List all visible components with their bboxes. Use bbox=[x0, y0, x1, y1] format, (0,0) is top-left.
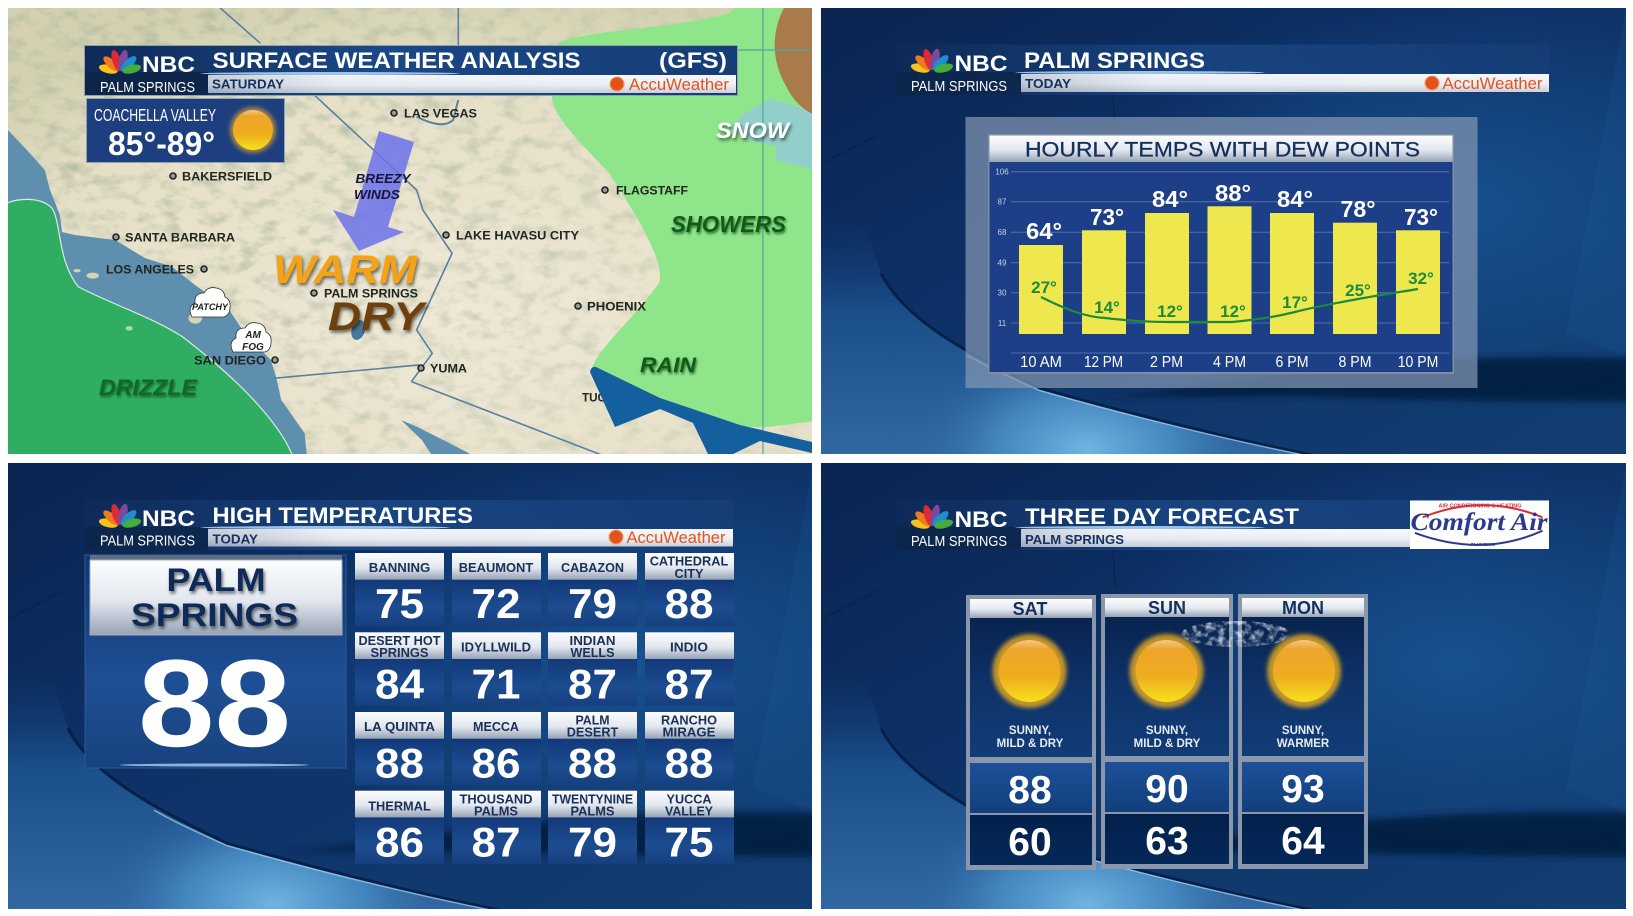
city: desert hot springs: 84 bbox=[375, 661, 425, 708]
dew point labels: 12° bbox=[1157, 302, 1183, 321]
panel: palm springs feature temperature: 88 bbox=[138, 635, 291, 773]
temperature labels: 78° bbox=[1340, 196, 1376, 222]
temperature labels bbox=[1026, 180, 1438, 244]
arrow: breezy winds: WINDS bbox=[354, 188, 401, 202]
forecast column: saturday: SUNNY, bbox=[1009, 725, 1051, 737]
city: banning: 75 bbox=[375, 580, 424, 627]
city: palm desert: DESERT bbox=[567, 724, 618, 740]
header bar: surface weather analysis: SATURDAY bbox=[212, 78, 285, 92]
temperature labels: 73° bbox=[1090, 204, 1124, 230]
panel: palm springs feature temperature bbox=[85, 555, 346, 773]
label: rain: RAIN bbox=[640, 354, 697, 377]
forecast column: saturday bbox=[966, 595, 1096, 870]
hour labels: 10 PM bbox=[1398, 354, 1438, 371]
panel: high temperatures bbox=[3, 455, 821, 916]
grid: city temperatures bbox=[355, 553, 734, 865]
city: la quinta bbox=[355, 712, 444, 786]
city labels: BAKERSFIELD bbox=[182, 170, 272, 184]
header bar: high temperatures: PALM SPRINGS bbox=[100, 532, 195, 550]
forecast column: saturday: MILD & DRY bbox=[997, 738, 1064, 750]
city: indian wells: 87 bbox=[568, 661, 617, 708]
label: drizzle: DRIZZLE bbox=[99, 375, 198, 400]
city: twentynine palms: PALMS bbox=[570, 804, 615, 818]
city: banning bbox=[355, 553, 444, 627]
cloud: patchy fog bbox=[190, 288, 230, 317]
temperature labels: 73° bbox=[1404, 204, 1438, 230]
cloud: am fog bbox=[231, 323, 271, 353]
header bar: high temperatures: NBC bbox=[142, 506, 195, 531]
label: dry: DRY bbox=[328, 295, 428, 339]
hour labels: 8 PM bbox=[1338, 354, 1372, 371]
forecast column: monday bbox=[1238, 594, 1368, 869]
forecast column: sunday: SUN bbox=[1148, 598, 1186, 618]
label: snow: SNOW bbox=[716, 118, 791, 143]
city: twentynine palms: TWENTYNINE bbox=[552, 792, 633, 806]
temperature labels: 64° bbox=[1026, 218, 1062, 244]
studio background bbox=[3, 455, 821, 916]
city: cathedral city bbox=[645, 553, 734, 627]
city: cathedral city: CATHEDRAL bbox=[650, 554, 728, 568]
forecast column: sunday bbox=[1101, 594, 1233, 869]
axis and gridlines: 106 bbox=[995, 168, 1009, 176]
city: mecca bbox=[452, 712, 541, 786]
icon: peacock bbox=[98, 49, 142, 75]
callout: coachella valley: COACHELLA VALLEY bbox=[94, 105, 216, 125]
panel: hourly temps chart bbox=[816, 0, 1633, 462]
header bar: surface weather analysis bbox=[84, 46, 738, 96]
map artwork bbox=[0, 3, 823, 460]
header bar: three day forecast: PALM SPRINGS bbox=[911, 533, 1007, 550]
city: palm desert: 88 bbox=[568, 739, 617, 786]
panel: palm springs feature temperature: PALM bbox=[166, 562, 266, 598]
forecast column: sunday: 90 bbox=[1145, 768, 1189, 811]
callout: coachella valley bbox=[86, 98, 284, 162]
cold front bbox=[590, 367, 812, 454]
icon: wispy cloud bbox=[1181, 621, 1291, 647]
header bar: palm springs bbox=[897, 44, 1550, 95]
label: warm: WARM bbox=[273, 248, 419, 292]
city: idyllwild: 71 bbox=[472, 661, 520, 708]
header bar: three day forecast bbox=[897, 500, 1549, 550]
temperature labels: 84° bbox=[1277, 186, 1313, 212]
city: rancho mirage: RANCHO bbox=[661, 712, 717, 728]
city: thousand palms: 87 bbox=[472, 818, 520, 865]
city labels: LOS ANGELES bbox=[106, 262, 194, 276]
city labels: FLAGSTAFF bbox=[616, 184, 688, 198]
panel: three day forecast bbox=[816, 455, 1633, 916]
header bar: high temperatures bbox=[84, 500, 734, 550]
cloud: am fog: AM bbox=[244, 330, 261, 341]
forecast column: saturday: 88 bbox=[1008, 769, 1052, 812]
city labels: SAN DIEGO bbox=[194, 354, 266, 368]
header bar: palm springs: PALM SPRINGS bbox=[911, 78, 1007, 95]
header bar: three day forecast: THREE DAY FORECAST bbox=[1025, 504, 1300, 529]
city: cathedral city: CITY bbox=[674, 566, 704, 581]
city: rancho mirage: 88 bbox=[664, 739, 714, 786]
city: palm desert bbox=[548, 712, 637, 786]
dew point labels: 14° bbox=[1094, 298, 1120, 317]
panel: surface weather analysis map bbox=[0, 3, 823, 460]
city: thousand palms bbox=[452, 791, 541, 865]
city: cathedral city: 88 bbox=[664, 580, 714, 627]
city: thermal: THERMAL bbox=[368, 798, 431, 814]
city: thermal: 86 bbox=[375, 818, 424, 865]
city: cabazon bbox=[548, 553, 637, 627]
dew point labels: 27° bbox=[1031, 278, 1057, 297]
city: indian wells bbox=[548, 632, 637, 708]
city: indian wells: WELLS bbox=[570, 645, 615, 660]
chart frame bbox=[966, 117, 1478, 388]
city: beaumont: 72 bbox=[472, 580, 520, 627]
city: rancho mirage bbox=[645, 712, 734, 786]
city: indio bbox=[645, 632, 734, 708]
temperature labels: 88° bbox=[1215, 180, 1251, 206]
header bar: palm springs: TODAY bbox=[1025, 77, 1072, 91]
icon: sun bbox=[992, 634, 1066, 708]
city: thousand palms: PALMS bbox=[474, 804, 518, 818]
header bar: surface weather analysis: SURFACE WEATHER ANALYSIS bbox=[212, 48, 580, 73]
header bar: palm springs: NBC bbox=[954, 51, 1008, 76]
city: indio: INDIO bbox=[670, 640, 708, 654]
hour labels: 6 PM bbox=[1276, 354, 1308, 371]
header bar: three day forecast: NBC bbox=[954, 507, 1008, 532]
city: yucca valley: VALLEY bbox=[665, 804, 713, 818]
city: indio: 87 bbox=[664, 661, 714, 708]
hour labels bbox=[1020, 354, 1438, 371]
header bar: high temperatures: HIGH TEMPERATURES bbox=[212, 503, 473, 528]
city: la quinta: LA QUINTA bbox=[364, 719, 436, 734]
forecast column: monday: WARMER bbox=[1277, 738, 1330, 750]
arrow: breezy winds bbox=[333, 131, 414, 251]
city labels bbox=[106, 106, 688, 404]
city: la quinta: 88 bbox=[375, 739, 424, 786]
panel: palm springs feature temperature: SPRINGS bbox=[131, 597, 298, 633]
icon: peacock bbox=[910, 48, 954, 74]
forecast column: saturday: 60 bbox=[1008, 821, 1052, 864]
axis and gridlines bbox=[995, 168, 1449, 353]
cloud: patchy fog: PATCHY bbox=[192, 302, 229, 312]
dew point labels: 32° bbox=[1408, 269, 1434, 288]
forecast column: sunday: SUNNY, bbox=[1146, 725, 1188, 737]
city: yucca valley: YUCCA bbox=[666, 792, 712, 806]
header bar: high temperatures: TODAY bbox=[212, 532, 259, 546]
chart title: HOURLY TEMPS WITH DEW POINTS bbox=[1025, 138, 1420, 162]
header bar: palm springs: PALM SPRINGS bbox=[1024, 48, 1205, 73]
icon: peacock bbox=[98, 503, 142, 529]
forecast column: monday: SUNNY, bbox=[1282, 725, 1324, 737]
city: mecca: MECCA bbox=[473, 719, 520, 734]
studio background bbox=[816, 455, 1633, 916]
hour labels: 12 PM bbox=[1084, 354, 1123, 371]
city labels: TUC bbox=[582, 390, 606, 404]
city: desert hot springs bbox=[355, 632, 444, 708]
city: beaumont bbox=[452, 553, 541, 627]
studio background bbox=[816, 0, 1633, 462]
icon: peacock bbox=[910, 504, 954, 530]
axis and gridlines: 49 bbox=[998, 258, 1007, 268]
logo: comfort air: Comfort Air bbox=[1410, 509, 1548, 536]
bars bbox=[1019, 206, 1440, 334]
city labels: PALM SPRINGS bbox=[324, 286, 418, 300]
hour labels: 4 PM bbox=[1213, 354, 1246, 371]
city: idyllwild bbox=[452, 632, 541, 708]
axis and gridlines: 30 bbox=[998, 288, 1007, 298]
city: thousand palms: THOUSAND bbox=[460, 792, 532, 806]
city: twentynine palms bbox=[548, 791, 637, 865]
icon: sun bbox=[1130, 634, 1204, 708]
city: cabazon: 79 bbox=[568, 580, 617, 627]
header bar: surface weather analysis: NBC bbox=[142, 52, 195, 77]
dew point labels: 12° bbox=[1220, 302, 1246, 321]
chart title bbox=[990, 136, 1452, 162]
city: palm desert: PALM bbox=[576, 712, 610, 728]
logo: comfort air bbox=[1410, 500, 1549, 549]
city: rancho mirage: MIRAGE bbox=[662, 724, 716, 740]
city: desert hot springs: DESERT HOT bbox=[358, 633, 441, 648]
forecast column: sunday: 63 bbox=[1145, 820, 1189, 863]
label: showers: SHOWERS bbox=[671, 211, 787, 237]
city labels: YUMA bbox=[430, 362, 467, 376]
header bar: surface weather analysis: PALM SPRINGS bbox=[100, 79, 195, 96]
temperature labels: 84° bbox=[1152, 186, 1188, 212]
city: banning: BANNING bbox=[369, 560, 430, 575]
hour labels: 10 AM bbox=[1020, 354, 1062, 371]
city labels: SANTA BARBARA bbox=[125, 230, 235, 244]
forecast column: monday: 93 bbox=[1281, 768, 1325, 811]
dew point labels: 25° bbox=[1345, 281, 1371, 300]
city: indian wells: INDIAN bbox=[570, 633, 616, 648]
header bar: surface weather analysis: AccuWeather bbox=[629, 75, 729, 94]
forecast column: monday: 64 bbox=[1281, 820, 1325, 863]
logo: comfort air: PLUMBING bbox=[1471, 542, 1495, 547]
city: beaumont: BEAUMONT bbox=[459, 560, 533, 575]
city: desert hot springs: SPRINGS bbox=[370, 645, 429, 660]
forecast column: sunday: MILD & DRY bbox=[1134, 738, 1201, 750]
city labels: LAS VEGAS bbox=[404, 106, 477, 120]
header bar: surface weather analysis: (GFS) bbox=[659, 48, 727, 73]
callout: coachella valley: 85°-89° bbox=[108, 125, 215, 162]
header bar: palm springs: AccuWeather bbox=[1442, 74, 1543, 93]
hour labels: 2 PM bbox=[1150, 354, 1183, 371]
axis and gridlines: 11 bbox=[998, 319, 1007, 328]
logo: comfort air: AIR CONDITIONING & HEATING bbox=[1438, 504, 1522, 510]
city: yucca valley bbox=[645, 791, 734, 865]
header bar: high temperatures: AccuWeather bbox=[626, 528, 726, 547]
forecast column: monday: MON bbox=[1282, 598, 1324, 618]
axis and gridlines: 87 bbox=[998, 198, 1007, 206]
city: thermal bbox=[355, 791, 444, 865]
dew point line bbox=[1041, 289, 1418, 322]
city labels: PHOENIX bbox=[587, 300, 646, 314]
city: yucca valley: 75 bbox=[664, 818, 714, 865]
city labels: LAKE HAVASU CITY bbox=[456, 228, 579, 242]
icon: sun bbox=[1267, 634, 1341, 708]
header bar: three day forecast: PALM SPRINGS bbox=[1025, 533, 1124, 547]
city: cabazon: CABAZON bbox=[561, 560, 624, 575]
axis and gridlines: 68 bbox=[998, 228, 1007, 237]
dew point labels: 17° bbox=[1282, 293, 1308, 312]
city: mecca: 86 bbox=[472, 739, 520, 786]
cloud: am fog: FOG bbox=[242, 342, 264, 353]
city: idyllwild: IDYLLWILD bbox=[461, 640, 531, 654]
city: twentynine palms: 79 bbox=[568, 818, 617, 865]
forecast column: saturday: SAT bbox=[1013, 599, 1047, 619]
chart: hourly temperatures with dew points bbox=[988, 134, 1454, 374]
dew point labels bbox=[1031, 269, 1434, 321]
arrow: breezy winds: BREEZY bbox=[356, 172, 412, 186]
